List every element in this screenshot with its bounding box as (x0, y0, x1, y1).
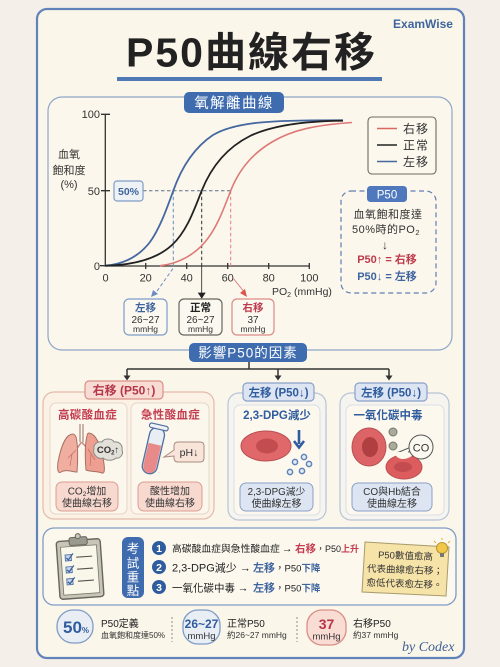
icon: test tube (139, 423, 169, 476)
caption (240, 483, 313, 511)
stat: right shift P50: 37 (319, 616, 334, 632)
P50 definition box: P50↑ = 右移 (357, 252, 417, 266)
key point 1: ，P50上升 (316, 543, 359, 554)
x axis title: PO (272, 286, 287, 298)
value box: right shift (232, 299, 274, 335)
stat: normal P50: 26~27 (185, 617, 219, 631)
key point 3 (152, 580, 321, 594)
chart: axes and ticks: 20 (140, 272, 152, 284)
caption: 使曲線右移 (145, 496, 195, 510)
card: acute acidosis (131, 403, 209, 514)
value box: normal (179, 299, 222, 335)
stat: right shift P50: 右移P50 (353, 617, 391, 630)
stat: P50 definition (57, 610, 165, 643)
panel: 2,3-DPG left shift (228, 383, 326, 520)
signature: by Codex (402, 640, 455, 655)
value box: right shift: mmHg (240, 324, 266, 334)
caption: 使曲線左移 (252, 497, 302, 510)
x axis title: 2 (287, 292, 291, 299)
panel heading: right shift: 右移 (P50↑) (93, 382, 155, 398)
50% marker (114, 181, 143, 201)
P50 definition box (341, 186, 436, 293)
icon: clipboard (56, 532, 104, 599)
key point 1 (152, 541, 359, 555)
card: 一氧化碳中毒 (354, 408, 423, 422)
50% marker: 50% (118, 186, 140, 198)
chart: axes and ticks: 60 (222, 272, 234, 284)
key point 3: 一氧化碳中毒 → (172, 582, 248, 594)
y axis title (52, 147, 86, 191)
legend: 左移 (403, 154, 429, 169)
key point 3: 左移 (253, 580, 275, 594)
icon: CO bubble: CO (413, 442, 430, 454)
label: exam key points: 重 (127, 570, 139, 584)
icon: red blood cell (352, 428, 386, 466)
stat: normal P50: mmHg (188, 631, 215, 642)
caption: 酸性增加 (150, 484, 190, 498)
arrow: right shift (240, 289, 247, 297)
y axis title: 血氧 (58, 147, 80, 161)
stat: right shift P50: 約37 mmHg (353, 630, 399, 640)
key point 2 (152, 560, 321, 574)
panel heading (184, 92, 284, 113)
dashed guides (143, 191, 245, 294)
chart: axes and ticks: 100 (300, 272, 318, 284)
caption (56, 482, 118, 511)
value box: right shift: 37 (247, 315, 259, 326)
key point 2: 左移 (253, 560, 275, 574)
stat: P50 definition: 50% (63, 618, 89, 637)
P50 definition box: 2 (415, 228, 420, 237)
panel: right shift factors (43, 381, 214, 519)
caption: 2 (83, 491, 87, 498)
label: exam key points (122, 537, 144, 598)
value box: left shift: 26~27 (131, 315, 160, 326)
key point 2: ，P50下降 (275, 562, 321, 574)
stat: right shift P50: mmHg (313, 632, 340, 642)
P50 definition box: 血氧飽和度達 (354, 207, 422, 221)
key point 3: 3 (156, 582, 162, 594)
icon: red blood cell (241, 431, 291, 461)
sticky note (362, 542, 449, 596)
connector arrows (124, 362, 392, 380)
icon: down arrow (294, 430, 304, 448)
P50 definition box: P50↓ = 左移 (357, 269, 417, 283)
y axis title: (%) (60, 179, 78, 191)
label: exam key points: 試 (127, 556, 140, 570)
P50 definition box: P50 (377, 190, 397, 202)
caption: CO與Hb結合 (363, 485, 421, 498)
icon: CO2 cloud (94, 439, 123, 460)
chart: axes and ticks: 0 (94, 261, 100, 273)
caption: 使曲線右移 (62, 496, 112, 510)
card: 2,3-DPG減少 (243, 408, 311, 422)
key point 1: 高碳酸血症與急性酸血症 (172, 542, 280, 555)
panel heading: left shift: 左移 (P50↓) (248, 386, 309, 400)
card: acute acidosis: 急性酸血症 (141, 408, 200, 422)
sticky note: 愈低代表愈左移。 (366, 577, 443, 591)
brand: ExamWise: ExamWise (393, 17, 453, 31)
legend: 正常 (403, 138, 429, 152)
y axis title: 飽和度 (52, 163, 86, 177)
curve: right shift (160, 122, 352, 266)
panel: oxygen dissociation curve (48, 92, 452, 350)
stat: P50 definition: P50定義 (101, 617, 139, 630)
arrow: left shift (151, 290, 158, 297)
icon: CO2 cloud: ↑ (114, 445, 119, 456)
key point 1: 1 (156, 543, 162, 555)
panel: CO poisoning left shift (340, 383, 449, 520)
caption: 增加 (86, 484, 106, 498)
label: exam key points: 點 (127, 583, 139, 598)
icon: light bulb (434, 538, 450, 557)
panel heading: left shift: 左移 (P50↓) (361, 386, 421, 400)
icon: CO2 cloud: CO (97, 445, 111, 456)
value box: left shift: 左移 (135, 301, 156, 314)
value box: right shift: 右移 (242, 301, 264, 314)
chart: axes and ticks (82, 109, 318, 284)
chart: axes and ticks: 100 (82, 109, 100, 121)
icon: CO particles (389, 428, 397, 450)
chart: axes and ticks: 80 (263, 272, 275, 284)
sticky note: 代表曲線愈右移； (367, 563, 443, 577)
x axis title: (mmHg) (291, 286, 332, 298)
card: hypercapnic acidosis (50, 403, 127, 514)
value box: left shift: mmHg (133, 324, 158, 334)
key point 2: 2 (156, 562, 162, 574)
P50 definition box: 50%時的PO (352, 224, 415, 236)
P50 definition box: ↓ (382, 238, 388, 252)
value box: left shift (124, 299, 167, 335)
chart: axes and ticks: 0 (102, 272, 109, 284)
key point 3: ，P50下降 (275, 582, 321, 594)
legend (368, 117, 436, 174)
card (234, 405, 320, 515)
title underline (117, 77, 382, 81)
stat: normal P50: 正常P50 (227, 617, 265, 630)
icon: pH bubble: pH↓ (180, 447, 198, 459)
sticky note: P50數值愈高 (378, 549, 433, 563)
panel heading: right shift (85, 381, 163, 399)
key point 1: → (282, 543, 292, 555)
chart: axes and ticks: 40 (181, 272, 193, 284)
stat: normal P50 (183, 610, 287, 644)
value box: normal: mmHg (188, 324, 213, 334)
caption: 2,3-DPG減少 (248, 485, 306, 498)
label: exam key points: 考 (127, 542, 139, 556)
heading: factors affecting P50: 影響P50的因素 (198, 344, 298, 360)
legend: 右移 (403, 121, 429, 136)
stat: normal P50: 約26~27 mmHg (227, 630, 287, 640)
title: P50曲線右移 (126, 30, 377, 76)
icon: bitten red blood cell (386, 452, 422, 479)
card (346, 405, 444, 515)
caption (352, 483, 432, 511)
caption: 使曲線左移 (367, 497, 417, 510)
value box: normal: 26~27 (186, 315, 215, 326)
curve: normal (105, 121, 343, 266)
curve: left shift (105, 120, 343, 266)
value box: normal: 正常 (190, 301, 211, 314)
icon: DPG particles (287, 454, 312, 475)
stat: right shift P50 (307, 610, 399, 645)
key point 1: 右移 (295, 542, 316, 555)
key point 2: 2,3-DPG減少 → (172, 560, 251, 574)
panel: exam key points (43, 528, 456, 605)
chart: axes and ticks: 50 (88, 186, 100, 198)
card: hypercapnic acidosis: 高碳酸血症 (58, 408, 117, 422)
icon: lungs (58, 424, 104, 473)
heading: factors affecting P50 (189, 343, 307, 362)
icon: CO2 cloud: 2 (111, 450, 115, 456)
stat: P50 definition: 血氧飽和度達50% (101, 630, 165, 640)
arrow: normal (198, 266, 205, 298)
panel heading: 氧解離曲線 (194, 94, 274, 112)
caption (138, 482, 202, 511)
caption: CO (68, 486, 83, 498)
